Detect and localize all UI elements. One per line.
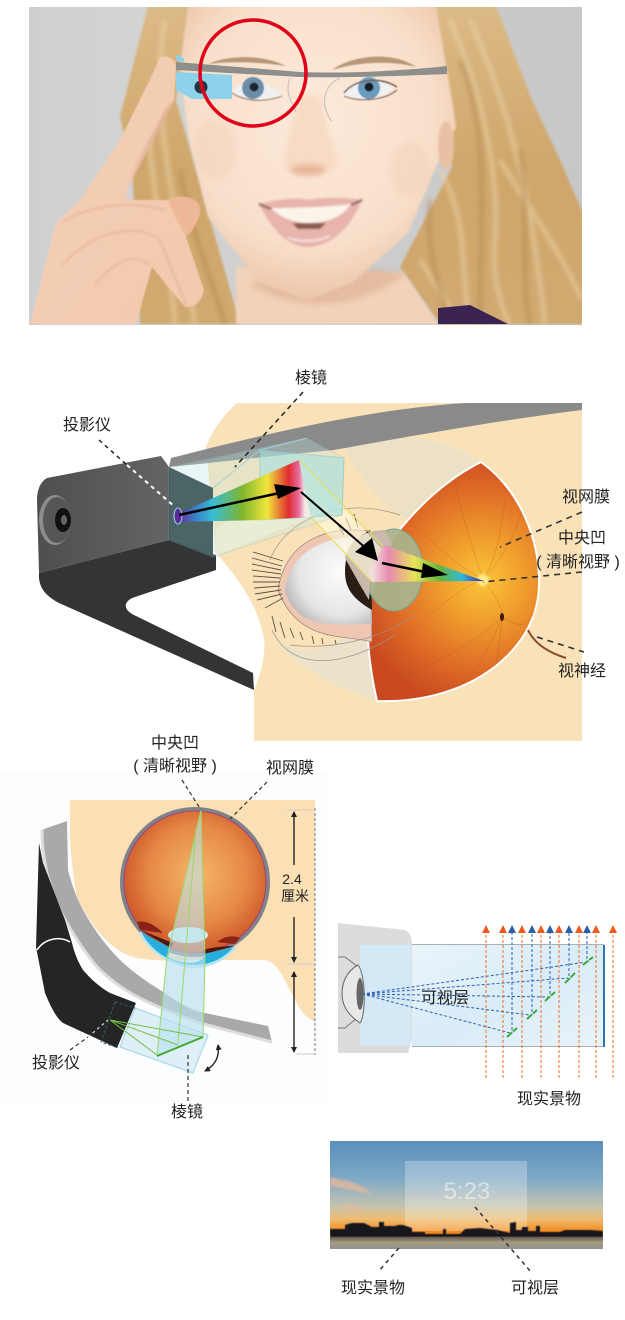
- curved glasses band: [42, 821, 272, 1042]
- glasses frame: [176, 62, 447, 77]
- prism box: [169, 438, 344, 557]
- retina: [368, 462, 539, 701]
- nose shading: [193, 95, 430, 198]
- label: prism: [171, 1055, 203, 1121]
- real-scene orange rays: [486, 930, 613, 1078]
- ear: [438, 121, 454, 169]
- arrow: projector to prism: [179, 484, 301, 515]
- label: fovea: [133, 734, 217, 810]
- water: [330, 1237, 603, 1249]
- upper sclera: [345, 438, 481, 520]
- label: 2.4 cm: [281, 871, 309, 904]
- cornea: [365, 529, 423, 611]
- cornea: [140, 932, 235, 965]
- rainbow beam: [177, 460, 311, 522]
- hair: [120, 6, 583, 324]
- projected light rays: [362, 928, 587, 1033]
- diagram 2: top-down section of eye and prism: [0, 734, 330, 1121]
- device housing: [338, 923, 412, 1053]
- label: retina: [500, 488, 610, 547]
- time text: 5:23: [444, 1178, 490, 1205]
- iris dark wedges: [137, 922, 240, 944]
- label: 2.4 cm: 厘米: [281, 888, 309, 904]
- left eye: [232, 77, 282, 100]
- black temple: [36, 843, 136, 1048]
- label: fovea: ( 清晰视野 ): [133, 757, 217, 775]
- light lines: [157, 810, 205, 1055]
- eye: [338, 957, 364, 1028]
- photo: woman wearing smart glasses: [29, 6, 583, 325]
- glasses band: [169, 403, 582, 467]
- green mirrors: [507, 957, 593, 1037]
- eyelashes: [252, 514, 358, 644]
- red circle highlight: [200, 20, 306, 126]
- mouth: [259, 198, 362, 247]
- prism internal rays: [110, 1020, 203, 1055]
- label: 2.4 cm: 2.4: [282, 871, 302, 887]
- arrow: through eye to fovea: [382, 563, 448, 578]
- label: fovea: [483, 529, 620, 582]
- label: optic nerve: [537, 637, 606, 680]
- visible layer panel: [405, 1161, 527, 1231]
- camera lens: [194, 80, 208, 94]
- iris: [345, 530, 372, 610]
- rainbow beam in eye: [368, 545, 484, 582]
- label: visible layer (photo): [475, 1207, 559, 1297]
- projector front face: [169, 467, 213, 557]
- skyline: [330, 1222, 603, 1237]
- glasses arm top face: [37, 456, 169, 573]
- label: fovea: ( 清晰视野 ): [536, 553, 620, 571]
- hand: [30, 57, 204, 324]
- label: prism: [235, 368, 327, 467]
- eyebrows: [208, 57, 286, 66]
- label: retina: 视网膜: [266, 759, 314, 777]
- prism mirror: [157, 1037, 203, 1056]
- label: projector: 投影仪: [63, 416, 111, 434]
- light band to prism: [157, 957, 205, 1055]
- projector outline: [101, 1002, 135, 1048]
- diagram 3: visible layer and real scene rays: [338, 923, 617, 1108]
- orange arrow heads: [482, 925, 617, 933]
- blue arrow heads: [508, 925, 591, 933]
- label: retina: [230, 759, 314, 819]
- skin background: [206, 403, 582, 741]
- pale background: [0, 772, 330, 1102]
- pale reflected light: [216, 460, 392, 582]
- blue projector module: [176, 55, 232, 99]
- label: fovea: 中央凹: [558, 529, 606, 547]
- lens: [168, 927, 208, 943]
- label: optic nerve: 视神经: [558, 662, 606, 680]
- arrow: prism rotation: [205, 1045, 218, 1071]
- eyelid and eye white: [278, 530, 372, 642]
- label: real scene (photo): 现实景物: [341, 1279, 405, 1297]
- face: [180, 6, 456, 300]
- label: projector: [32, 1020, 108, 1072]
- label: prism: 棱镜: [295, 368, 327, 387]
- label: projector: [63, 416, 175, 507]
- diagram 1: glasses projecting into the eye: [37, 368, 620, 741]
- prism: [120, 1008, 208, 1073]
- skin: [70, 800, 315, 1022]
- glass panel: [412, 944, 604, 1047]
- label: real scene: 现实景物: [517, 1090, 581, 1108]
- clouds: [330, 1177, 372, 1211]
- dimension lines: [287, 808, 315, 1055]
- label: fovea: 中央凹: [151, 734, 199, 752]
- label: visible layer (photo): 可视层: [511, 1279, 559, 1297]
- light cone in eye: [167, 810, 205, 957]
- label: real scene (photo): [341, 1248, 405, 1297]
- optic disc: [500, 613, 504, 621]
- label: projector: 投影仪: [32, 1054, 80, 1072]
- glasses arm underside: [39, 540, 254, 690]
- label: visible layer: 可视层: [421, 989, 469, 1007]
- label: retina: 视网膜: [562, 488, 610, 506]
- fovea: [477, 574, 489, 586]
- retina blood vessels: [400, 480, 535, 695]
- optic nerve: [528, 630, 566, 658]
- right eye: [344, 77, 397, 100]
- lower sclera: [275, 620, 377, 700]
- photo: sunset skyline with overlay: [330, 1141, 603, 1249]
- label: prism: 棱镜: [171, 1102, 203, 1121]
- camera lens on arm: [39, 495, 71, 545]
- inner pale panel: [360, 945, 411, 1045]
- shirt: [438, 305, 508, 324]
- skin fold lines: [270, 508, 415, 661]
- eyeball: [122, 809, 268, 955]
- reflected beam edge lines: [299, 460, 392, 582]
- arrow: prism to eye: [301, 492, 378, 561]
- neck: [236, 267, 438, 324]
